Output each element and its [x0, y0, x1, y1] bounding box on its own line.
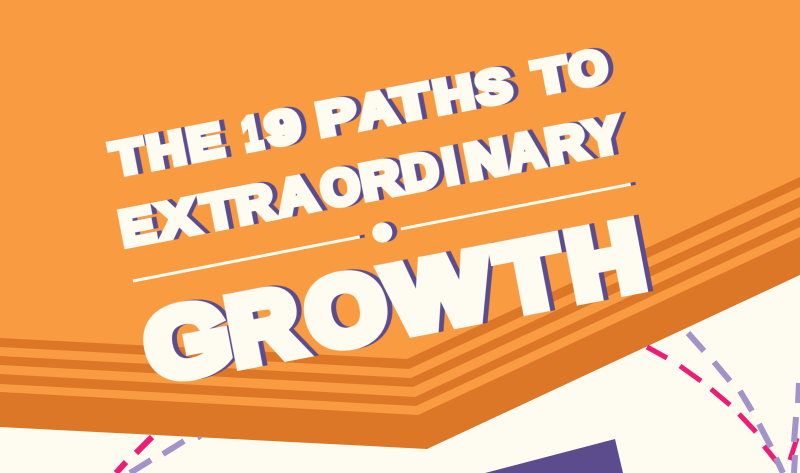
title line: extraordinary: Y	[581, 106, 626, 168]
title line: the 19 paths to	[107, 39, 612, 186]
panel: layered folded stripes	[0, 177, 800, 473]
divider with dot	[131, 174, 633, 291]
dashed path: pink left	[116, 437, 152, 473]
title line: the 19 paths to: 1	[238, 106, 266, 160]
title line: growth: W	[379, 231, 500, 355]
title line: growth: T	[489, 217, 570, 334]
title line: the 19 paths to: T	[529, 47, 572, 104]
title line: the 19 paths to: A	[353, 80, 400, 138]
panel: cream lower area	[0, 275, 800, 473]
title line: the 19 paths to: P	[313, 88, 361, 146]
title line: growth: G	[136, 281, 238, 402]
title line: the 19 paths to: H	[430, 65, 478, 124]
title line: the 19 paths to: T	[388, 74, 434, 132]
title line: extraordinary: T	[197, 180, 240, 241]
title line: extraordinary: N	[461, 128, 512, 191]
title line: extraordinary: A	[502, 121, 547, 183]
title line: the 19 paths to: S	[471, 58, 516, 116]
title line: extraordinary	[115, 106, 626, 257]
title line: extraordinary: R	[231, 173, 279, 235]
title line: extraordinary: R	[356, 148, 405, 211]
title line: the 19 paths to: 9	[261, 99, 304, 156]
purple shape at bottom	[485, 439, 623, 473]
title line: growth	[136, 201, 652, 402]
title line: extraordinary: E	[115, 196, 159, 257]
title line: the 19 paths to: H	[143, 121, 189, 179]
dashed path: lavender right	[688, 333, 799, 473]
title line: extraordinary: R	[541, 113, 591, 175]
title line: growth: O	[297, 251, 395, 371]
title line: extraordinary: O	[316, 156, 365, 219]
title line: growth: H	[559, 201, 652, 320]
title line: growth: R	[219, 268, 308, 386]
dashed path: lavender left	[130, 437, 201, 473]
title line: the 19 paths to: T	[107, 129, 149, 186]
title line: extraordinary: I	[438, 137, 462, 195]
dashed path: pink right	[647, 347, 797, 467]
title line: extraordinary: D	[397, 141, 443, 203]
title line: extraordinary: X	[153, 188, 202, 250]
title line: the 19 paths to: E	[183, 113, 227, 171]
title line: extraordinary: A	[272, 165, 321, 227]
title line: the 19 paths to: O	[564, 39, 612, 98]
title	[107, 39, 652, 402]
